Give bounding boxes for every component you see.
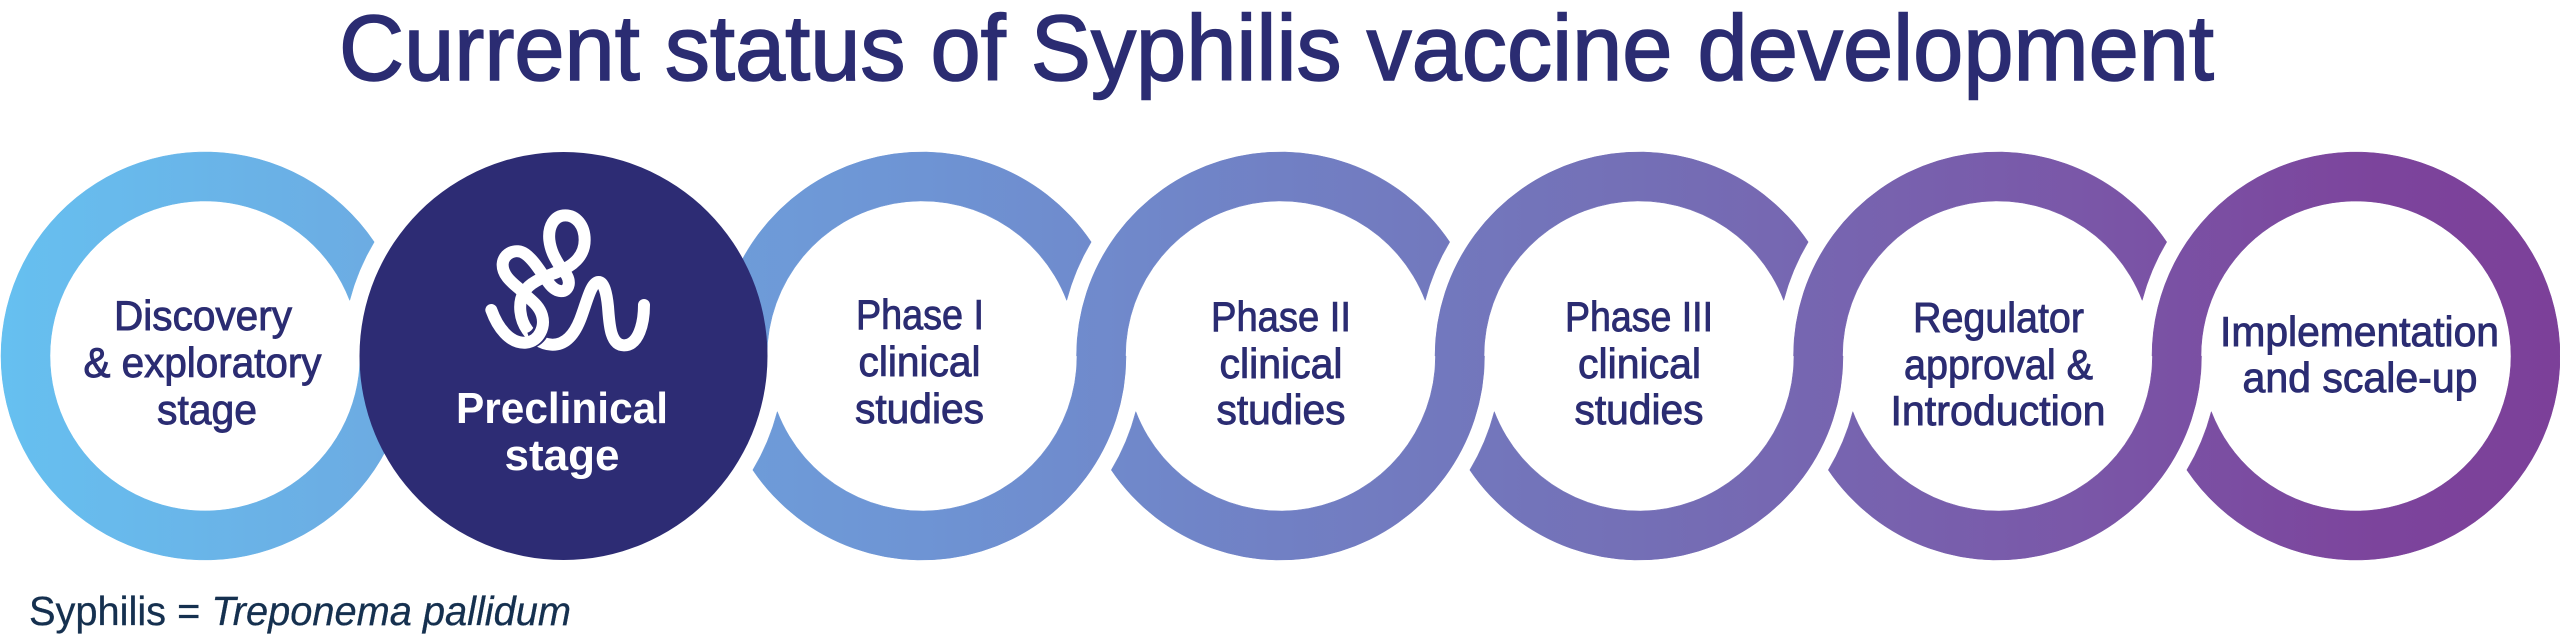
stage 2: preclinical highlighted circle: Preclinical <box>456 384 668 433</box>
stage 5: phase III ring: Phase III <box>1565 293 1713 340</box>
stage 5: phase III ring: clinical <box>1578 340 1701 387</box>
stage 6: regulator approval ring: approval & <box>1904 341 2093 388</box>
stage 5: phase III ring <box>1435 152 1843 560</box>
stage 1: discovery ring: stage <box>157 386 257 433</box>
stage 1: discovery ring <box>1 152 409 560</box>
stage 7: implementation ring <box>2152 152 2560 560</box>
stage 1: discovery ring: & exploratory <box>84 339 322 386</box>
icon: treponema spirochete <box>491 215 644 345</box>
stage 5: phase III ring: studies <box>1574 386 1704 433</box>
stage 4: phase II ring: clinical <box>1220 340 1342 387</box>
stage 7: implementation ring: Implementation <box>2220 308 2499 355</box>
stage 3: phase I ring: studies <box>855 385 984 432</box>
stage 4: phase II ring: studies <box>1216 386 1346 433</box>
stage 6: regulator approval ring <box>1794 152 2202 560</box>
stage 1: discovery ring: Discovery <box>114 292 292 339</box>
stage 3: phase I ring <box>718 152 1126 560</box>
stage 6: regulator approval ring: Introduction <box>1890 387 2106 434</box>
stage 3: phase I ring: clinical <box>858 338 980 385</box>
stage 7: implementation ring: and scale-up <box>2242 354 2478 401</box>
stage 3: phase I ring: Phase I <box>856 291 984 338</box>
footnote: Syphilis = Treponema pallidum <box>29 588 571 634</box>
stage 2: preclinical highlighted circle <box>360 152 768 560</box>
stage 6: regulator approval ring: Regulator <box>1913 294 2084 341</box>
stage 4: phase II ring <box>1076 152 1484 560</box>
stage 2: preclinical highlighted circle: stage <box>504 431 620 480</box>
stage 4: phase II ring: Phase II <box>1211 293 1351 340</box>
